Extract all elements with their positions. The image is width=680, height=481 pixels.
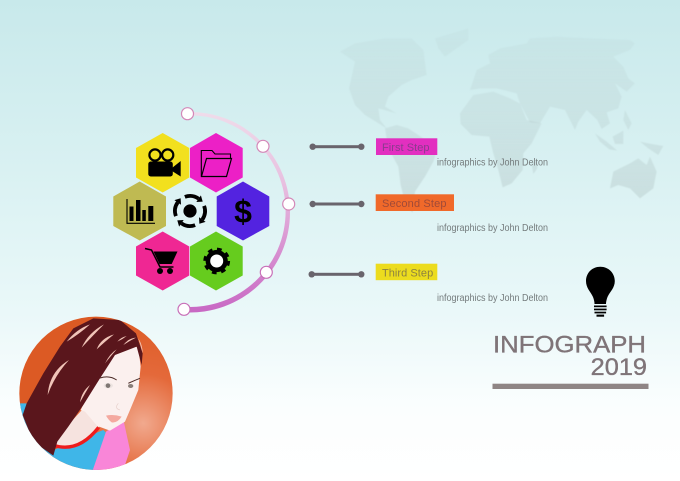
arc node 3: [283, 198, 295, 210]
icon: center cycle: [174, 195, 206, 227]
connector line 3: [308, 271, 364, 277]
hexagon: shopping cart: [136, 232, 189, 290]
title: [493, 331, 647, 381]
step label: First Step: [376, 138, 437, 155]
title underline: [492, 384, 648, 389]
hexagon cluster: [113, 133, 269, 290]
caption 3: infographics by John Delton: [437, 293, 548, 304]
arc band: [184, 112, 290, 312]
arc node 2: [257, 140, 269, 152]
decorative arc timeline: [178, 108, 295, 315]
avatar shirt blue: [20, 403, 106, 470]
hexagon: dollar: [217, 182, 269, 240]
avatar eyes and brows: [100, 377, 140, 388]
arc node 5: [178, 303, 190, 315]
avatar face: [81, 347, 141, 431]
avatar hair: [23, 318, 143, 456]
caption 2: infographics by John Delton: [437, 223, 548, 234]
avatar lips: [106, 415, 122, 422]
hexagon: bar chart: [113, 182, 166, 240]
connector line 1: [310, 144, 364, 150]
caption 1: infographics by John Delton: [437, 158, 548, 168]
title: 2019: [591, 354, 647, 381]
step label: First Step: First Step: [382, 142, 430, 154]
icon: light bulb: [586, 267, 615, 317]
avatar neck: [56, 410, 100, 446]
world map: [340, 28, 663, 213]
connector line 2: [310, 201, 364, 207]
title: INFOGRAPH: [493, 331, 646, 358]
avatar hair highlights: [48, 324, 143, 402]
avatar nose: [117, 403, 120, 410]
avatar collar: [54, 427, 99, 447]
step label: Second Step: Second Step: [382, 198, 447, 210]
arc node 1: [182, 108, 194, 120]
hexagon: dollar: $: [234, 194, 252, 230]
avatar shirt pink: [92, 422, 130, 470]
avatar backdrop: [17, 315, 177, 472]
hexagon: gear: [190, 232, 243, 290]
hexagon: video camera: [136, 133, 189, 192]
arc node 4: [260, 266, 272, 278]
avatar portrait: [17, 315, 177, 473]
step label: Third Step: Third Step: [382, 268, 433, 280]
step label: Second Step: [376, 194, 454, 211]
step label: Third Step: [376, 264, 437, 280]
hexagon: folder: [190, 133, 243, 192]
